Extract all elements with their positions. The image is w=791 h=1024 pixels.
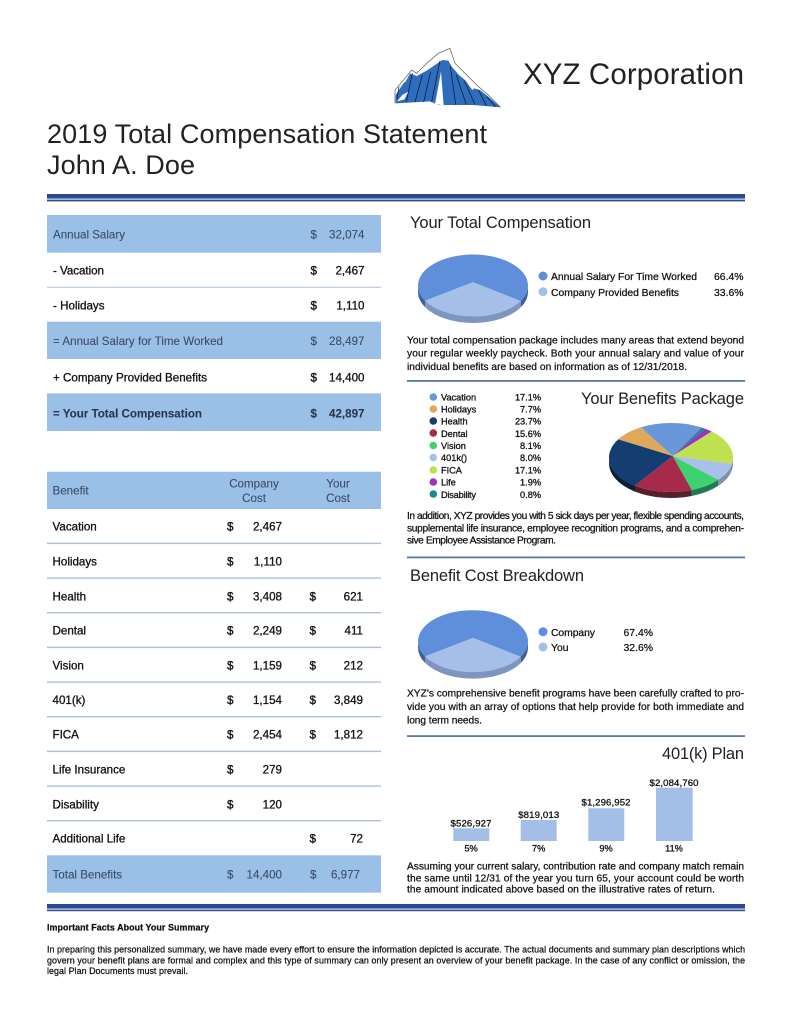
text block: 401(k) note: the same until 12/31 of the year you turn 65, your account could be worth [407, 874, 744, 884]
bottom double rule [47, 904, 745, 911]
panel: benefit cost table [47, 472, 381, 893]
pie chart: total compensation [418, 254, 528, 323]
row: holidays: $ [227, 556, 234, 568]
row: FICA: 2,454 [253, 728, 283, 742]
legend: benefits package: Vision [441, 441, 466, 451]
bar chart: 401(k) projections: 5% [464, 844, 478, 854]
row: life insurance: Life Insurance [52, 764, 125, 776]
row: holidays: Holidays [52, 556, 97, 568]
legend: benefits package: 0.8% [520, 490, 541, 500]
row: vacation [52, 520, 282, 534]
row: total benefits: 14,400 [247, 868, 282, 882]
text block: 401(k) note: Assuming your current salary, contribution rate and company match remain [407, 861, 744, 872]
row: holidays: 1,110 [254, 556, 282, 568]
row: health: $ [227, 590, 234, 604]
row: additional life: $ [310, 832, 316, 846]
row: vision: 212 [344, 660, 363, 672]
legend: benefits package: Life [441, 478, 456, 488]
row: life insurance [52, 764, 282, 776]
row: total benefits: Total Benefits [52, 868, 122, 882]
footer heading: Important Facts About Your Summary [47, 923, 209, 933]
row: holidays: - Holidays [53, 300, 105, 312]
row: life insurance: 279 [263, 764, 282, 776]
row: health: 621 [344, 590, 363, 604]
table header [52, 478, 351, 505]
row: disability: $ [227, 798, 234, 812]
legend: benefits package: Health [441, 417, 468, 427]
title [47, 119, 487, 180]
legend: benefits package: 15.6% [515, 429, 541, 439]
row: health: $ [310, 590, 316, 604]
legend: benefits package: 8.1% [520, 441, 541, 451]
row: holidays: $ [310, 300, 318, 312]
row: vacation: - Vacation [53, 264, 104, 278]
row: vision [52, 660, 363, 672]
top double rule [47, 194, 745, 201]
legend: total compensation: 66.4% [714, 272, 744, 283]
row: vision: $ [310, 660, 316, 672]
title: 2019 Total Compensation Statement [47, 119, 487, 149]
bar chart: 401(k) projections: $526,927 [450, 819, 492, 830]
row: additional life: Additional Life [52, 832, 125, 846]
row: holidays [53, 300, 364, 312]
table header: Company [229, 478, 279, 490]
legend: benefits package: 1.9% [520, 478, 541, 488]
row: salary for time worked: 28,497 [329, 335, 364, 348]
title: John A. Doe [47, 150, 195, 180]
legend: benefits package: Holidays [441, 405, 477, 415]
row: vacation: $ [310, 264, 318, 278]
row: total benefits [52, 868, 360, 882]
table header: Cost [242, 492, 267, 505]
text block: benefits note: In addition, XYZ provides you with 5 sick days per year, flexible spending accounts, [407, 511, 744, 522]
panel: compensation summary table [47, 215, 381, 431]
row: company provided benefits: + Company Provided Benefits [53, 372, 207, 384]
row: annual salary [53, 228, 365, 242]
row: life insurance: $ [227, 764, 234, 776]
legend: benefits package: 7.7% [520, 405, 541, 415]
text block: total compensation note: your regular weekly paycheck. Both your annual salary and value of your [407, 348, 745, 360]
row: vacation: Vacation [52, 520, 97, 534]
row: disability: Disability [52, 798, 99, 812]
row: company provided benefits [53, 372, 364, 384]
row: health [52, 590, 363, 604]
row: FICA: $ [227, 728, 234, 742]
row: disability [52, 798, 282, 812]
legend: benefits package: FICA [441, 465, 463, 475]
footer text: govern your benefit plans are formal and complex and this type of summary can only present an overview of your benefit package. In the case of any conflict or omission, the [47, 955, 745, 965]
legend: cost breakdown: 67.4% [624, 628, 653, 639]
row: vision: 1,159 [253, 660, 282, 672]
row: disability: 120 [263, 798, 282, 812]
pie chart: cost breakdown [418, 610, 528, 679]
heading: 401(k) Plan [662, 745, 744, 763]
row: FICA: FICA [52, 728, 79, 742]
legend: cost breakdown: Company [551, 628, 596, 639]
row: dental: Dental [52, 624, 86, 638]
text block: cost breakdown note [407, 689, 744, 726]
panel: 401(k) plan [407, 745, 744, 896]
text block: total compensation note: individual benefits are based on information as of 12/31/2018. [407, 362, 687, 373]
row: 401(k) [52, 694, 363, 707]
bar chart: 401(k) projections [450, 778, 698, 854]
text block: cost breakdown note: XYZ's comprehensive benefit programs have been carefully crafted to pro- [407, 689, 744, 700]
row: 401(k): 401(k) [52, 694, 86, 707]
legend: cost breakdown: 32.6% [624, 643, 653, 654]
legend: cost breakdown: You [551, 643, 569, 654]
bar chart: 401(k) projections: 11% [665, 844, 683, 854]
row: vision: $ [227, 660, 234, 672]
legend: total compensation: Annual Salary For Time Worked [551, 272, 697, 283]
row: 401(k): $ [310, 694, 316, 707]
row: salary for time worked: = Annual Salary for Time Worked [53, 335, 223, 348]
company name: XYZ Corporation [523, 58, 744, 91]
row: company provided benefits: $ [310, 372, 318, 384]
row: total compensation: 42,897 [329, 408, 364, 420]
row: 401(k): 1,154 [253, 694, 283, 707]
row: dental: 411 [345, 624, 363, 638]
row: annual salary: Annual Salary [53, 228, 125, 242]
text block: total compensation note [407, 336, 745, 373]
text block: benefits note: sive Employee Assistance Program. [407, 536, 556, 546]
legend: benefits package: Dental [441, 429, 468, 439]
text block: 401(k) note: the amount indicated above based on the illustrative rates of return. [407, 884, 715, 896]
row: total benefits: 6,977 [331, 868, 360, 882]
row: 401(k): $ [227, 694, 234, 707]
table header: Cost [326, 492, 351, 505]
row: dental [52, 624, 363, 638]
row: additional life: 72 [350, 832, 363, 846]
row: dental: $ [310, 624, 316, 638]
row: salary for time worked [53, 335, 364, 348]
bar chart: 401(k) projections: 7% [532, 844, 545, 854]
row: annual salary: $ [310, 228, 318, 242]
row: total compensation: = Your Total Compensation [53, 408, 202, 420]
row: FICA: $ [310, 728, 316, 742]
legend: total compensation: Company Provided Benefits [551, 288, 679, 299]
heading: Your Total Compensation [410, 214, 591, 232]
table header: Benefit [52, 484, 89, 498]
row: FICA [52, 728, 363, 742]
row: health: 3,408 [253, 590, 282, 604]
row: health: Health [52, 590, 86, 604]
legend: benefits package [430, 392, 541, 500]
text block: benefits note [407, 511, 744, 546]
legend: benefits package: 8.0% [520, 453, 541, 463]
bar chart: 401(k) projections: $1,296,952 [582, 798, 630, 809]
legend: benefits package: 17.1% [515, 392, 541, 402]
legend: benefits package: Disability [441, 490, 476, 500]
footer text: legal Plan Documents must prevail. [47, 966, 188, 976]
panel: your benefits package [407, 390, 744, 546]
text block: cost breakdown note: vide you with an array of options that help provide for both immediate and [407, 702, 744, 713]
row: additional life [52, 832, 363, 846]
row: vision: Vision [52, 660, 84, 672]
legend: benefits package: 23.7% [515, 417, 541, 427]
pie chart: benefits package [609, 423, 733, 498]
footer text: In preparing this personalized summary, we have made every effort to ensure the information depicted is accurate. The actual documents and summary plan descriptions which [47, 945, 745, 955]
footer: important facts [47, 923, 745, 976]
bar chart: 401(k) projections: $819,013 [518, 810, 559, 821]
row: total benefits: $ [310, 868, 317, 882]
bar chart: 401(k) projections: $2,084,760 [650, 778, 698, 789]
row: company provided benefits: 14,400 [329, 372, 364, 384]
legend: benefits package: 401k() [441, 453, 467, 463]
text block: total compensation note: Your total compensation package includes many areas that extend beyond [407, 336, 744, 346]
legend: cost breakdown [538, 627, 653, 654]
text block: cost breakdown note: long term needs. [407, 715, 482, 726]
row: vacation: 2,467 [253, 520, 282, 534]
row: vacation [53, 264, 364, 278]
row: FICA: 1,812 [334, 728, 363, 742]
table header: Your [326, 478, 350, 490]
text block: 401(k) note [407, 861, 744, 896]
row: vacation: $ [227, 520, 234, 534]
row: salary for time worked: $ [310, 335, 318, 348]
icon: mountain logo [395, 48, 501, 107]
row: total compensation [53, 408, 364, 420]
heading: Your Benefits Package [581, 390, 744, 408]
row: vacation: 2,467 [335, 264, 364, 278]
row: total compensation: $ [310, 408, 318, 420]
row: total benefits: $ [227, 868, 234, 882]
heading: Benefit Cost Breakdown [410, 567, 584, 585]
legend: total compensation [538, 272, 744, 299]
legend: total compensation: 33.6% [714, 288, 744, 299]
bar chart: 401(k) projections: 9% [599, 844, 613, 854]
panel: benefit cost breakdown [407, 567, 744, 726]
row: holidays [52, 556, 282, 568]
text block: benefits note: supplemental life insurance, employee recognition programs, and a comprehen- [407, 524, 744, 534]
legend: benefits package: Vacation [441, 392, 476, 402]
footer text [47, 945, 745, 976]
panel: your total compensation [407, 214, 745, 373]
legend: benefits package: 17.1% [515, 465, 541, 475]
row: holidays: 1,110 [336, 300, 364, 312]
row: dental: $ [227, 624, 234, 638]
row: 401(k): 3,849 [334, 694, 363, 707]
row: annual salary: 32,074 [329, 228, 365, 242]
row: dental: 2,249 [253, 624, 282, 638]
